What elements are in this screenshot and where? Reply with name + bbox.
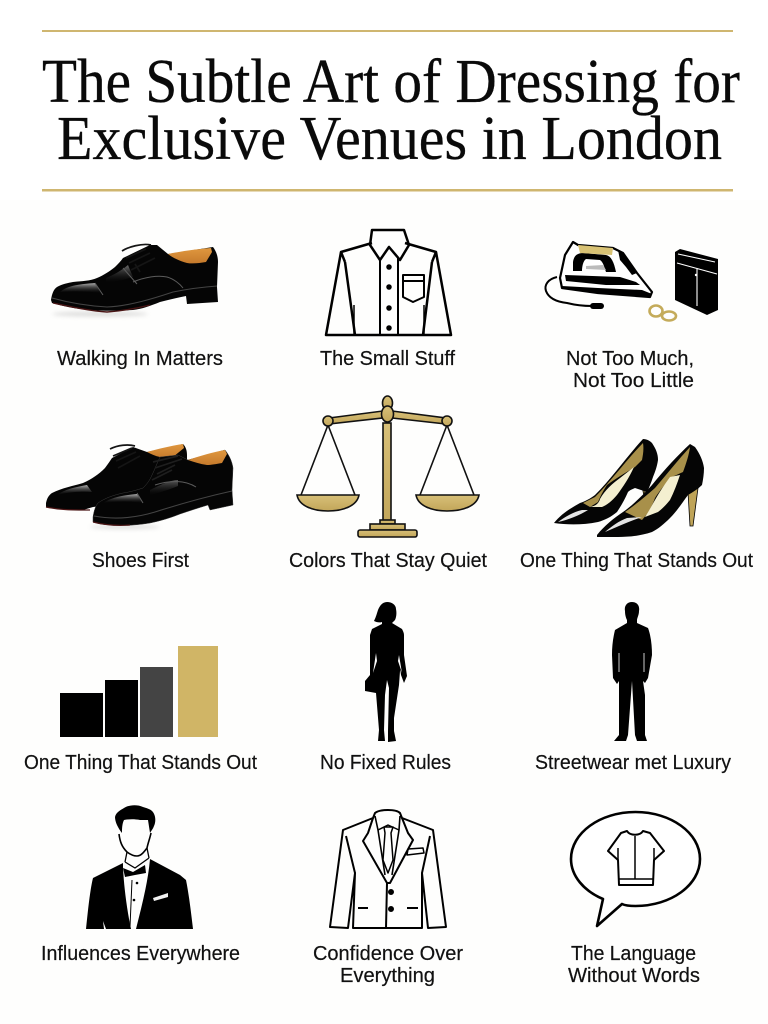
label: The Language [571, 943, 696, 965]
label: One Thing That Stands Out [24, 752, 257, 774]
label: Colors That Stay Quiet [289, 550, 487, 572]
panel: The Small Stuff [320, 230, 455, 370]
panel: Not Too Much, Not Too Little [545, 242, 718, 392]
bottom gold rule [42, 189, 733, 192]
icon: speech bubble with shirt [571, 812, 700, 926]
label: Shoes First [92, 550, 189, 572]
label: Not Too Much, [566, 348, 694, 370]
icon: front high heel [597, 444, 704, 537]
label: The Small Stuff [320, 348, 455, 370]
icon: iron [545, 242, 652, 309]
bar chart [60, 646, 218, 737]
label: Influences Everywhere [41, 943, 240, 965]
panel: One Thing That Stands Out (bars) [24, 646, 257, 774]
label: Confidence Over [313, 943, 463, 965]
icon: black box [675, 249, 718, 315]
panel: No Fixed Rules [320, 602, 451, 774]
panel: Shoes First [46, 444, 233, 572]
label [566, 348, 694, 392]
icon: gold rings [650, 306, 676, 320]
panel: The Language Without Words [568, 812, 700, 987]
icon: man silhouette [612, 602, 652, 741]
panel: Colors That Stay Quiet [289, 396, 487, 572]
icon: woman silhouette [365, 602, 407, 742]
panel: Streetwear met Luxury [535, 602, 731, 774]
icon: man in tuxedo [86, 805, 193, 929]
label: Walking In Matters [57, 348, 223, 370]
icon: blazer outline [330, 810, 446, 928]
label: Everything [340, 965, 435, 987]
title [42, 48, 740, 173]
icon: black oxford shoe [51, 244, 218, 316]
label: Streetwear met Luxury [535, 752, 731, 774]
label [568, 943, 700, 987]
label [313, 943, 463, 987]
title: Exclusive Venues in London [57, 105, 722, 173]
panel: Confidence Over Everything [313, 810, 463, 987]
icon: shirt outline [326, 230, 451, 335]
icon: back high heel [554, 439, 658, 524]
top gold rule [42, 30, 733, 32]
icon: front oxford shoe [90, 450, 233, 529]
panel: Influences Everywhere [41, 805, 240, 965]
label: Not Too Little [573, 370, 694, 392]
icon: gold balance scale [297, 396, 479, 537]
icon: back oxford shoe [46, 444, 187, 510]
label: Without Words [568, 965, 700, 987]
panel: Walking In Matters [51, 244, 223, 370]
panel: One Thing That Stands Out (heels) [520, 439, 753, 572]
label: One Thing That Stands Out [520, 550, 753, 572]
label: No Fixed Rules [320, 752, 451, 774]
